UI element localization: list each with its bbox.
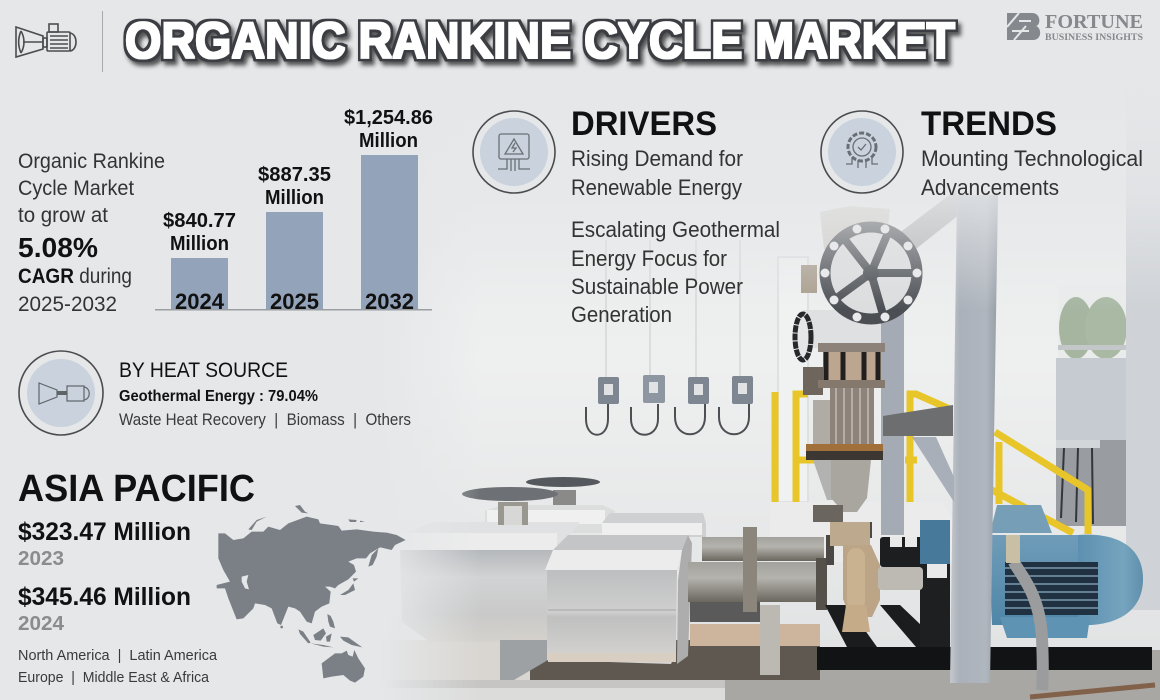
- photo: ORC pump and motor installation: [380, 80, 1160, 700]
- drivers text: Energy Focus for: [571, 246, 727, 271]
- axis: [155, 309, 432, 310]
- value labels: $840.77: [163, 210, 236, 232]
- region figures: $345.46 Million: [18, 583, 191, 611]
- heat exchanger stack: [803, 343, 885, 538]
- trends text: Advancements: [921, 175, 1059, 200]
- drivers text: Escalating Geothermal: [571, 217, 780, 242]
- market summary text: 5.08%: [18, 232, 98, 263]
- logo subtitle: BUSINESS INSIGHTS: [1045, 33, 1143, 43]
- back tank: [485, 505, 615, 533]
- icon: heat source: [19, 351, 103, 435]
- by heat source text: Waste Heat Recovery | Biomass | Others: [119, 411, 411, 429]
- front insulated box: [545, 535, 692, 664]
- bar 2024: [171, 258, 228, 309]
- yellow railings: [775, 392, 1088, 534]
- drivers text: Renewable Energy: [571, 175, 742, 200]
- market summary text: CAGR during: [18, 265, 132, 288]
- wall: [380, 80, 1160, 650]
- bar chart: [155, 107, 433, 314]
- market summary text: to grow at: [18, 204, 108, 227]
- value labels: Million: [265, 187, 324, 209]
- tank legs: [500, 640, 548, 680]
- pump casing: [830, 522, 923, 632]
- year labels: 2032: [365, 289, 414, 314]
- region figures: [18, 518, 191, 635]
- front steel column: [950, 195, 998, 683]
- market summary text: 2025-2032: [18, 293, 117, 316]
- left fade: [380, 80, 480, 700]
- by heat source text: Geothermal Energy : 79.04%: [119, 388, 318, 405]
- outlet pipes: [688, 527, 834, 675]
- icon: drivers: [473, 111, 555, 193]
- region heading: ASIA PACIFIC: [18, 468, 255, 510]
- title: ORGANIC RANKINE CYCLE MARKET: [125, 12, 955, 69]
- year labels: 2024: [175, 289, 225, 314]
- icon: trends: [821, 111, 903, 193]
- steel brace: [883, 405, 953, 436]
- map: Asia Pacific: [217, 505, 406, 683]
- drivers text: [571, 146, 780, 327]
- region figures: 2024: [18, 613, 65, 635]
- by heat source text: [119, 359, 411, 429]
- other regions: North America | Latin America: [18, 647, 218, 664]
- trends text: Mounting Technological: [921, 146, 1143, 171]
- drivers text: Sustainable Power: [571, 274, 743, 299]
- other regions: [18, 647, 218, 686]
- logo text: FORTUNE: [1045, 11, 1143, 33]
- valve side flange: [801, 265, 817, 293]
- flexible hose: [1014, 562, 1043, 690]
- region figures: 2023: [18, 548, 64, 570]
- black base frame: [817, 537, 1152, 670]
- hose fitting: [1006, 535, 1020, 563]
- upper diagonal pipe: [890, 190, 960, 260]
- second box: [602, 513, 706, 537]
- left tank: [400, 522, 580, 642]
- blue motor: [920, 505, 1143, 638]
- market summary text: Cycle Market: [18, 177, 134, 200]
- value labels: $887.35: [258, 164, 331, 186]
- value labels: [163, 107, 433, 255]
- drivers text: Rising Demand for: [571, 146, 743, 171]
- bar 2025: [266, 212, 323, 309]
- floor: [380, 624, 1160, 700]
- window with trees: [1056, 285, 1128, 526]
- platform: [770, 502, 962, 562]
- logo mark: [1007, 13, 1040, 40]
- wall meters: [586, 240, 753, 435]
- vertical pipe under valve: [803, 310, 881, 348]
- heading: trends: TRENDS: [921, 105, 1057, 143]
- value labels: Million: [359, 130, 418, 152]
- market summary text: Organic Rankine: [18, 150, 165, 173]
- trends text: [921, 146, 1143, 200]
- other regions: Europe | Middle East & Africa: [18, 669, 210, 686]
- year labels: 2025: [270, 289, 319, 314]
- drivers text: Generation: [571, 302, 672, 327]
- right column: [1126, 80, 1160, 610]
- value labels: Million: [170, 233, 229, 255]
- by heat source text: BY HEAT SOURCE: [119, 359, 288, 382]
- door: [778, 257, 808, 502]
- chain wheel: [795, 314, 811, 360]
- lower diagonal brace: [912, 437, 954, 502]
- header divider: [102, 11, 103, 72]
- logo: Fortune Business Insights: [1007, 11, 1143, 43]
- top fade: [380, 80, 1160, 310]
- value labels: $1,254.86: [344, 107, 433, 129]
- column behind: [881, 300, 904, 535]
- header icon: motor: [16, 24, 76, 57]
- rust pipe: [1030, 685, 1155, 697]
- hand wheels on tanks: [462, 477, 600, 525]
- bar 2032: [361, 155, 418, 309]
- region figures: $323.47 Million: [18, 518, 191, 546]
- heading: drivers: DRIVERS: [571, 105, 717, 143]
- valve handwheel: [820, 224, 922, 322]
- year labels: [175, 289, 414, 314]
- market summary text: [18, 150, 165, 316]
- valve body top: [820, 206, 890, 249]
